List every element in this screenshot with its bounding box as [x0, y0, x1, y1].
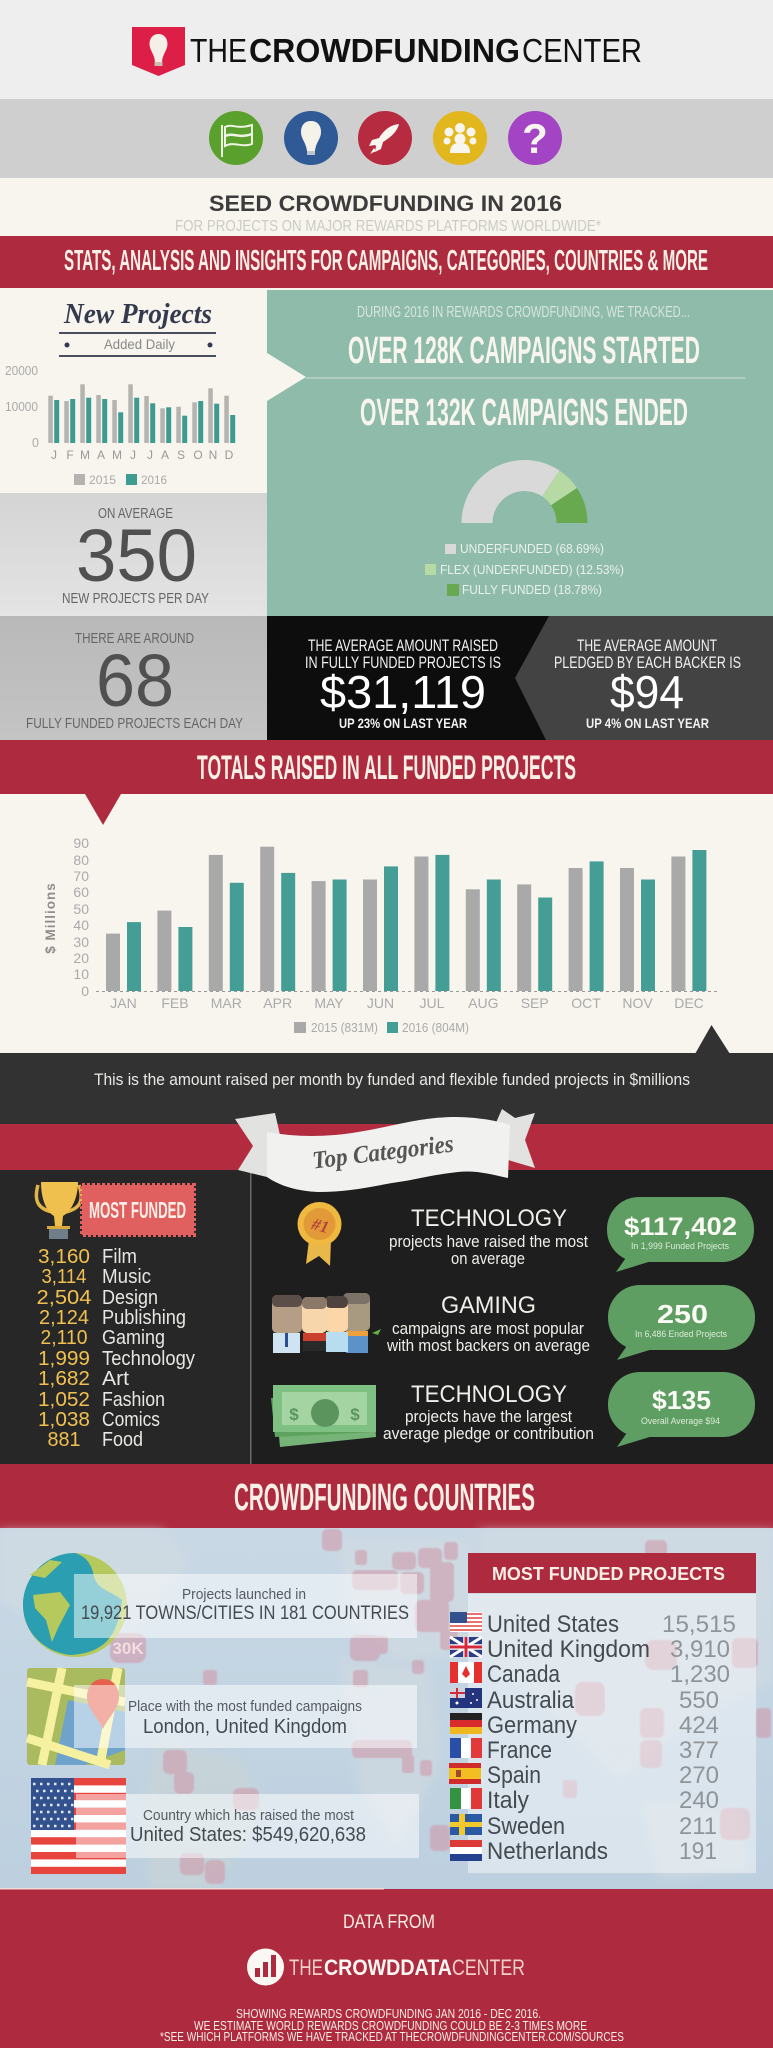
subheading: added daily: Added Daily: [104, 336, 175, 352]
list: most funded categories: Technology: [102, 1348, 195, 1370]
bar chart: new projects per month: N: [209, 448, 217, 462]
panel: 68 fully funded: THERE ARE AROUND: [75, 630, 194, 647]
ribbon: top categories heading: [235, 1109, 535, 1192]
panel: average raised in fully funded projects: THE AVERAGE AMOUNT RAISED: [308, 636, 498, 655]
callout: country raised the most: Country which has raised the most: [143, 1807, 355, 1824]
panel: countries map: [0, 1528, 773, 1890]
bar chart: monthly totals: 90: [73, 835, 89, 851]
list: country names: Netherlands: [487, 1838, 608, 1865]
list: project counts: 550: [679, 1687, 719, 1714]
icon: map pin: [27, 1668, 125, 1765]
bubble: 117,402: $117,402: [624, 1213, 737, 1241]
callout: towns and cities: [74, 1574, 417, 1638]
bar chart: new projects per month: F: [66, 448, 74, 462]
icon: light bulb: [284, 111, 338, 165]
banner: crowdfunding countries heading: [0, 1464, 773, 1528]
panel: average pledged by backer: [500, 616, 773, 740]
list: country names: United States: [487, 1611, 619, 1638]
footnotes: *SEE WHICH PLATFORMS WE HAVE TRACKED AT THECROWDFUNDINGCENTER.COM/SOURCES: [160, 2030, 624, 2044]
arrow pointer: [267, 353, 306, 401]
list: project counts: 270: [679, 1762, 719, 1789]
list: most funded categories: 2,124: [39, 1307, 89, 1329]
list: project counts: 211: [679, 1813, 717, 1840]
title block: [0, 178, 773, 237]
bubble: 117,402: [607, 1197, 754, 1272]
bar chart: new projects per month: A: [161, 448, 169, 462]
icon: medal: #1: [309, 1214, 331, 1237]
icon: us flag: [31, 1778, 126, 1874]
icon: money: $: [350, 1405, 360, 1424]
subtitle: FOR PROJECTS ON MAJOR REWARDS PLATFORMS WORLDWIDE*: [175, 218, 601, 235]
list: most funded categories: Publishing: [102, 1307, 186, 1329]
banner: totals raised heading: [0, 740, 773, 794]
list: most funded categories: [36, 1246, 195, 1451]
list: country names: [487, 1611, 650, 1865]
list: most funded categories: 2,504: [36, 1287, 92, 1309]
list: most funded categories: 2,110: [40, 1327, 88, 1349]
list: country names: Sweden: [487, 1813, 565, 1840]
legend: funding outcome: [425, 542, 624, 597]
bubble: 250: [608, 1285, 755, 1360]
bar chart: monthly totals: MAY: [314, 995, 344, 1011]
panel: chart note: [0, 1025, 773, 1124]
panel: chart note: This is the amount raised per month by funded and flexible funded projects in $millions: [94, 1070, 690, 1089]
panel: campaigns tracked: [267, 290, 773, 616]
gauge chart: funding outcome: [462, 460, 588, 523]
bar chart: monthly totals: 30: [73, 934, 89, 950]
map markers: [110, 1529, 771, 1884]
bar chart: monthly totals: JAN: [110, 995, 137, 1011]
text: gaming most backers: with most backers on average: [386, 1336, 590, 1355]
list: project counts: 424: [679, 1712, 719, 1739]
list: country names: Canada: [487, 1661, 561, 1688]
bar chart: monthly totals: JUN: [367, 995, 394, 1011]
bar chart: monthly totals: $ Millions: [43, 882, 58, 954]
bubble: 135: $135: [652, 1385, 711, 1415]
label: most funded: MOST FUNDED: [89, 1197, 186, 1223]
logo: The Crowdfunding Center: THE: [190, 32, 247, 69]
list: project counts: 3,910: [670, 1636, 730, 1663]
bar chart: new projects per month: A: [97, 448, 105, 462]
bar chart: monthly totals: JUL: [420, 995, 445, 1011]
panel: average pledged by backer: $94: [610, 666, 684, 718]
bar chart: new projects per month: J: [147, 448, 153, 462]
list: country names: France: [487, 1737, 552, 1764]
bar chart: monthly totals: 0: [81, 983, 89, 999]
bubble: 135: Overall Average $94: [641, 1416, 720, 1426]
banner: crowdfunding countries heading: CROWDFUNDING COUNTRIES: [234, 1477, 535, 1519]
list: most funded categories: Music: [102, 1266, 151, 1288]
list: most funded categories: 1,682: [38, 1368, 90, 1390]
icon: gaming backers group: [272, 1293, 381, 1353]
panel: countries map: 30K: [112, 1639, 144, 1658]
list: most funded categories: 3,114: [42, 1266, 86, 1288]
list: country names: Germany: [487, 1712, 577, 1739]
list: most funded categories: 881: [48, 1429, 80, 1451]
logo: The Crowdfunding Center: CROWDFUNDING: [249, 32, 520, 69]
logo: The Crowd Data Center: CENTER: [452, 1955, 525, 1980]
icon: rocket: [358, 111, 412, 165]
text: gaming most backers: GAMING: [441, 1292, 536, 1319]
icon: question mark: ?: [522, 115, 548, 162]
heading: new projects: New Projects: [63, 298, 212, 330]
panel: 350 new projects: ON AVERAGE: [98, 505, 173, 522]
text: gaming most backers: campaigns are most popular: [392, 1319, 584, 1338]
bar chart: monthly totals: APR: [263, 995, 292, 1011]
list: country names: Spain: [487, 1762, 541, 1789]
text: technology raised the most: projects have raised the most: [389, 1232, 588, 1251]
panel: top categories: [0, 1109, 773, 1464]
bar chart: monthly totals: MAR: [211, 995, 242, 1011]
callout: country raised the most: United States: $549,620,638: [130, 1824, 366, 1846]
icon: question mark: [508, 111, 562, 165]
list: most funded categories: Food: [102, 1429, 143, 1451]
list: most funded categories: 1,038: [38, 1409, 90, 1431]
logo: The Crowd Data Center: [247, 1948, 525, 1986]
footnotes: WE ESTIMATE WORLD REWARDS CROWDFUNDING COULD BE 2-3 TIMES MORE: [194, 2019, 587, 2033]
bar chart: new projects per month: S: [177, 448, 185, 462]
panel: average pledged by backer: UP 4% ON LAST YEAR: [586, 715, 709, 731]
bar chart: monthly totals: 20: [73, 950, 89, 966]
list: country names: Australia: [487, 1687, 575, 1714]
text: technology largest pledge: TECHNOLOGY: [411, 1381, 567, 1408]
callout: towns and cities: Projects launched in: [182, 1586, 306, 1603]
header: logo band: [0, 0, 773, 99]
panel: average raised in fully funded projects: UP 23% ON LAST YEAR: [339, 715, 467, 731]
panel: 68 fully funded: FULLY FUNDED PROJECTS EACH DAY: [26, 715, 243, 732]
panel: 350 new projects: [0, 493, 267, 616]
text: technology raised the most: on average: [451, 1249, 525, 1268]
callout: most funded place: Place with the most funded campaigns: [128, 1698, 362, 1715]
data from label: DATA FROM: [343, 1912, 435, 1933]
footnotes: [160, 2007, 624, 2044]
bar chart: new projects per month: D: [225, 448, 234, 462]
panel: 68 fully funded: 68: [96, 639, 174, 722]
bar chart: monthly totals: 40: [73, 917, 89, 933]
logo: The Crowdfunding Center: [132, 27, 642, 76]
bar chart: new projects per month: J: [130, 448, 136, 462]
bar chart: monthly totals: SEP: [521, 995, 549, 1011]
panel: average raised in fully funded projects: $31,119: [320, 666, 486, 718]
subheading: added daily: [59, 332, 216, 357]
bar chart: monthly totals: 2016 (804M): [402, 1020, 469, 1035]
panel: average pledged by backer: THE AVERAGE AMOUNT: [577, 636, 717, 655]
panel: new projects chart: [0, 288, 267, 493]
logo: The Crowdfunding Center: CENTER: [522, 32, 642, 69]
list: most funded categories: Fashion: [102, 1389, 165, 1411]
bar chart: new projects per month: 20000: [5, 364, 38, 378]
icon: people: [433, 111, 487, 165]
icon: trophy: [36, 1182, 81, 1239]
bar chart: new projects per month: 10000: [5, 400, 38, 414]
bar chart: monthly totals: 50: [73, 901, 89, 917]
callout: most funded place: London, United Kingdom: [143, 1716, 347, 1738]
bar chart: monthly totals: NOV: [622, 995, 653, 1011]
list: most funded categories: 1,052: [38, 1389, 90, 1411]
list: project counts: 1,230: [670, 1661, 730, 1688]
legend: funding outcome: FLEX (UNDERFUNDED) (12.53%): [440, 563, 624, 577]
text: technology raised the most: [389, 1205, 588, 1268]
bar chart: monthly totals: DEC: [674, 995, 704, 1011]
list: most funded categories: Comics: [102, 1409, 160, 1431]
panel: most funded projects: [449, 1553, 756, 1873]
panel: average raised in fully funded projects: [267, 616, 549, 740]
main title: SEED CROWDFUNDING IN 2016: [209, 191, 562, 216]
text: technology largest pledge: average pledge or contribution: [383, 1424, 594, 1443]
bar chart: monthly totals: 80: [73, 852, 89, 868]
list: most funded categories: Design: [102, 1287, 158, 1309]
banner: stats heading: [0, 236, 773, 288]
list: country names: United Kingdom: [487, 1636, 650, 1663]
logo: The Crowd Data Center: THE: [289, 1955, 323, 1980]
footnotes: SHOWING REWARDS CROWDFUNDING JAN 2016 - DEC 2016.: [236, 2007, 541, 2021]
bubble: 250: In 6,486 Ended Projects: [635, 1329, 727, 1339]
callout: most funded place: [74, 1685, 417, 1748]
text: technology largest pledge: projects have the largest: [405, 1407, 572, 1426]
label: most funded: [82, 1185, 194, 1235]
bar chart: new projects per month: 0: [32, 436, 39, 450]
bar chart: new projects per month: M: [80, 448, 90, 462]
panel: most funded projects: MOST FUNDED PROJECTS: [492, 1564, 725, 1584]
icon: flag: [209, 111, 263, 165]
footer: [0, 1888, 773, 2048]
list: project counts: 240: [679, 1787, 719, 1814]
bubble: 250: 250: [657, 1299, 708, 1329]
bar chart: monthly totals: 10: [73, 966, 89, 982]
panel: average raised in fully funded projects: IN FULLY FUNDED PROJECTS IS: [305, 653, 501, 672]
callout: towns and cities: 19,921 TOWNS/CITIES IN 181 COUNTRIES: [81, 1603, 409, 1624]
list: most funded categories: 1,999: [38, 1348, 90, 1370]
list: most funded categories: Gaming: [102, 1327, 165, 1349]
bar chart: monthly totals: 2015 (831M): [311, 1020, 378, 1035]
list: project counts: 377: [679, 1737, 719, 1764]
bar chart: new projects per month: O: [193, 448, 203, 462]
bar chart: monthly totals: OCT: [571, 995, 601, 1011]
bar chart: monthly totals: 60: [73, 884, 89, 900]
panel: 350 new projects: NEW PROJECTS PER DAY: [62, 590, 209, 607]
bar chart: monthly totals: [43, 835, 720, 1035]
list: country names: Italy: [487, 1787, 529, 1814]
list: project counts: [662, 1611, 736, 1865]
list: project counts: 191: [679, 1838, 717, 1865]
logo: The Crowd Data Center: CROWDDATA: [324, 1955, 452, 1980]
bar chart: new projects per month: 2016: [141, 473, 167, 487]
icon band: [0, 99, 773, 178]
bar chart: new projects per month: J: [51, 448, 57, 462]
text: technology largest pledge: [383, 1381, 594, 1443]
callout: country raised the most: [76, 1794, 419, 1858]
list: most funded categories: Film: [102, 1246, 137, 1268]
bubble: 135: [608, 1372, 755, 1447]
bar chart: new projects per month: [5, 364, 235, 487]
flags: [449, 1612, 482, 1861]
legend: funding outcome: UNDERFUNDED (68.69%): [460, 542, 604, 556]
list: most funded categories: 3,160: [38, 1246, 90, 1268]
bar chart: monthly totals: FEB: [161, 995, 189, 1011]
bar chart: monthly totals: 70: [73, 868, 89, 884]
list: project counts: 15,515: [662, 1611, 736, 1638]
bar chart: new projects per month: 2015: [89, 473, 116, 487]
icon: medal: [298, 1202, 342, 1266]
text: gaming most backers: [386, 1292, 590, 1355]
bar chart: new projects per month: M: [112, 448, 122, 462]
list: most funded categories: Art: [102, 1368, 129, 1390]
panel: 68 fully funded: [0, 616, 267, 740]
text: technology raised the most: TECHNOLOGY: [411, 1205, 567, 1232]
bubble: 117,402: In 1,999 Funded Projects: [631, 1241, 729, 1251]
panel: totals chart: [0, 794, 773, 1053]
bar chart: monthly totals: AUG: [468, 995, 498, 1011]
icon: money: [271, 1385, 376, 1447]
icon: money: $: [289, 1405, 299, 1424]
legend: funding outcome: FULLY FUNDED (18.78%): [462, 583, 602, 597]
ribbon: top categories heading: Top Categories: [311, 1131, 455, 1175]
panel: 350 new projects: 350: [76, 514, 197, 597]
icon: globe: [23, 1553, 127, 1657]
